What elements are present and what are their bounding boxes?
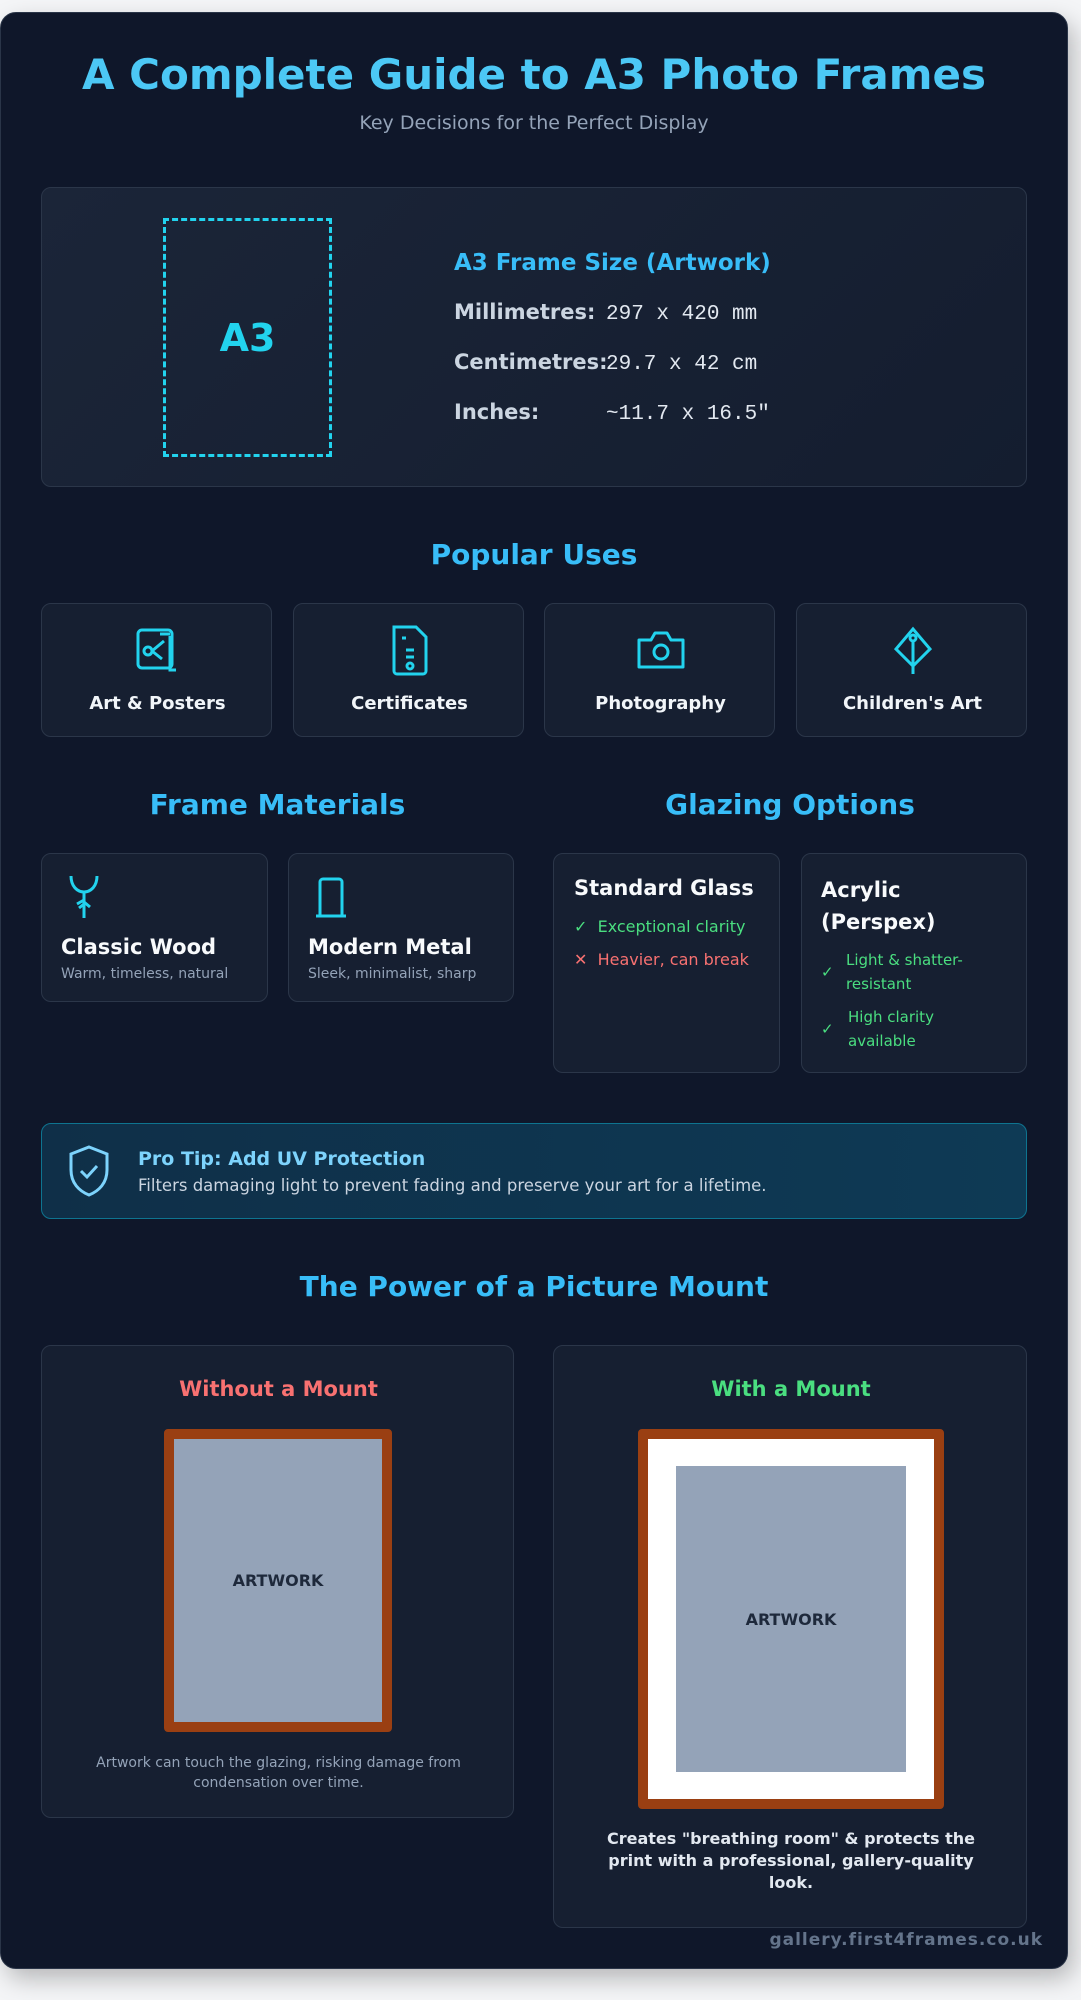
panel: with mount: Creates "breathing room" & protects the print with a professional, gallery-quality look. bbox=[607, 1829, 975, 1892]
callout: pro tip: Pro Tip: Add UV Protection bbox=[138, 1148, 425, 1170]
callout: pro tip: Filters damaging light to prevent fading and preserve your art for a lifetime. bbox=[138, 1176, 767, 1195]
card: Standard Glass: ✕ Heavier, can break bbox=[574, 950, 749, 969]
frame without mount: ARTWORK bbox=[233, 1571, 323, 1590]
heading: Glazing Options: Glazing Options bbox=[665, 788, 915, 821]
panel: without mount bbox=[41, 1345, 514, 1818]
use: Certificates bbox=[293, 603, 524, 737]
panel: with mount bbox=[553, 1345, 1027, 1928]
card: Classic Wood: Warm, timeless, natural bbox=[61, 966, 228, 982]
icon: metal bbox=[316, 878, 346, 918]
card: Acrylic: Acrylic bbox=[821, 878, 901, 902]
use: Photography: Photography bbox=[595, 693, 726, 714]
card: Modern Metal: Modern Metal bbox=[308, 935, 472, 959]
card: Standard Glass: Standard Glass bbox=[574, 876, 754, 900]
heading: Popular Uses: Popular Uses bbox=[431, 538, 637, 571]
card: Classic Wood bbox=[41, 853, 268, 1002]
panel: with mount: With a Mount bbox=[711, 1377, 871, 1401]
frame with mount: ARTWORK bbox=[746, 1610, 836, 1628]
use: Certificates: Certificates bbox=[351, 693, 468, 714]
size details: 29.7 x 42 cm bbox=[606, 353, 757, 376]
frame with mount bbox=[638, 1429, 944, 1809]
size details: ~11.7 x 16.5" bbox=[606, 403, 770, 426]
card: Standard Glass: ✓ Exceptional clarity bbox=[574, 917, 745, 936]
title: A Complete Guide to A3 Photo Frames bbox=[82, 50, 986, 99]
use: Children's Art bbox=[796, 603, 1027, 737]
size details: A3 Frame Size (Artwork) bbox=[454, 250, 771, 276]
panel: A3 size bbox=[41, 187, 1027, 487]
use: Photography bbox=[544, 603, 775, 737]
icon: wood bbox=[70, 876, 98, 918]
use: Art & Posters bbox=[41, 603, 272, 737]
card: Acrylic: Light & shatter- bbox=[846, 951, 963, 969]
A3 dashed outline bbox=[163, 218, 332, 457]
callout: pro tip bbox=[41, 1123, 1027, 1219]
card: Modern Metal: Sleek, minimalist, sharp bbox=[308, 966, 476, 982]
card: Modern Metal bbox=[288, 853, 514, 1002]
panel: without mount: Artwork can touch the glazing, risking damage from condensation over time. bbox=[96, 1755, 461, 1791]
heading: Frame Materials: Frame Materials bbox=[150, 788, 405, 821]
size details: Inches: bbox=[454, 400, 539, 424]
footer: gallery.first4frames.co.uk bbox=[769, 1930, 1043, 1950]
card: Acrylic: (Perspex) bbox=[821, 910, 936, 934]
size details: 297 x 420 mm bbox=[606, 303, 757, 326]
heading: Picture Mount: The Power of a Picture Mount bbox=[300, 1270, 768, 1303]
card: Acrylic: available bbox=[848, 1032, 916, 1050]
use: Children's Art: Children's Art bbox=[843, 693, 982, 714]
use: Art & Posters: Art & Posters bbox=[89, 693, 226, 714]
frame without mount bbox=[164, 1429, 392, 1732]
card: Acrylic: ✓ bbox=[821, 963, 834, 981]
size details: Centimetres: bbox=[454, 350, 608, 374]
A3 dashed outline: A3 bbox=[220, 316, 275, 360]
card: Acrylic: ✓ bbox=[821, 1020, 834, 1038]
subtitle: Key Decisions for the Perfect Display bbox=[359, 112, 709, 134]
size details bbox=[454, 250, 771, 426]
card: Acrylic: High clarity bbox=[848, 1008, 934, 1026]
card: Standard Glass bbox=[553, 853, 780, 1073]
panel: uses bbox=[41, 603, 1027, 737]
panel: without mount: Without a Mount bbox=[179, 1377, 378, 1401]
card: Acrylic: resistant bbox=[846, 975, 911, 993]
size details: Millimetres: bbox=[454, 300, 595, 324]
card: Classic Wood: Classic Wood bbox=[61, 935, 216, 959]
icon: shield bbox=[70, 1145, 108, 1197]
card: Acrylic bbox=[801, 853, 1027, 1073]
